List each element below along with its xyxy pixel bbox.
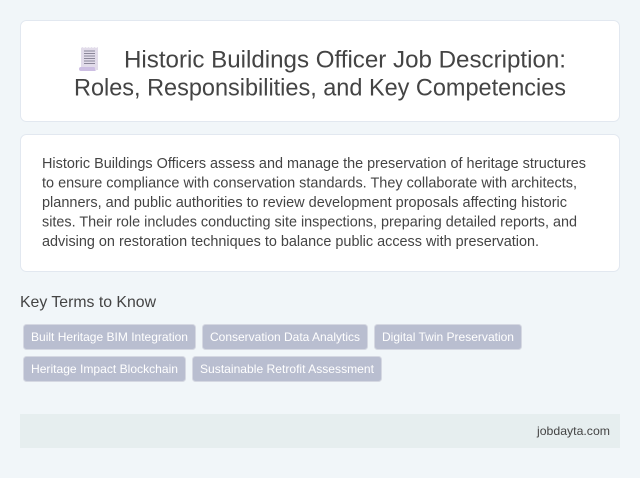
text block: summary paragraph: advising on restoration techniques to balance public access with preservation. (42, 234, 539, 250)
tag: Built Heritage BIM Integration (24, 324, 196, 350)
tag: Digital Twin Preservation: Digital Twin Preservation (382, 330, 514, 344)
heading: key terms: Key Terms to Know (20, 294, 156, 311)
tag: Digital Twin Preservation (374, 324, 522, 350)
tag: Sustainable Retrofit Assessment (192, 356, 382, 382)
text block: summary paragraph: sites. Their role includes conducting site inspections, preparing detailed reports, and (42, 214, 577, 230)
heading: title (74, 46, 566, 102)
footer: site name: jobdayta.com (536, 424, 610, 438)
panel: title card (20, 20, 620, 122)
tag: Heritage Impact Blockchain (24, 356, 186, 382)
heading: title: Roles, Responsibilities, and Key Competencies (74, 74, 566, 102)
heading: title: Historic Buildings Officer Job Description: (124, 46, 566, 74)
tag: Conservation Data Analytics (202, 324, 368, 350)
tag: Sustainable Retrofit Assessment: Sustainable Retrofit Assessment (200, 362, 375, 376)
tag: Conservation Data Analytics: Conservation Data Analytics (210, 330, 360, 344)
text block: summary paragraph: Historic Buildings Officers assess and manage the preservation of heritage structures (42, 156, 586, 172)
panel: summary (20, 134, 620, 272)
text block: summary paragraph (42, 156, 586, 250)
tags: key terms (24, 324, 522, 382)
tag: Heritage Impact Blockchain: Heritage Impact Blockchain (31, 362, 178, 376)
icon: scroll document (79, 47, 98, 71)
footer bar (20, 414, 620, 448)
text block: summary paragraph: to ensure compliance with conservation standards. They collaborate with architects, (42, 176, 577, 192)
text block: summary paragraph: planners, and public authorities to review development proposals affecting historic (42, 195, 567, 211)
tag: Built Heritage BIM Integration: Built Heritage BIM Integration (31, 330, 188, 344)
